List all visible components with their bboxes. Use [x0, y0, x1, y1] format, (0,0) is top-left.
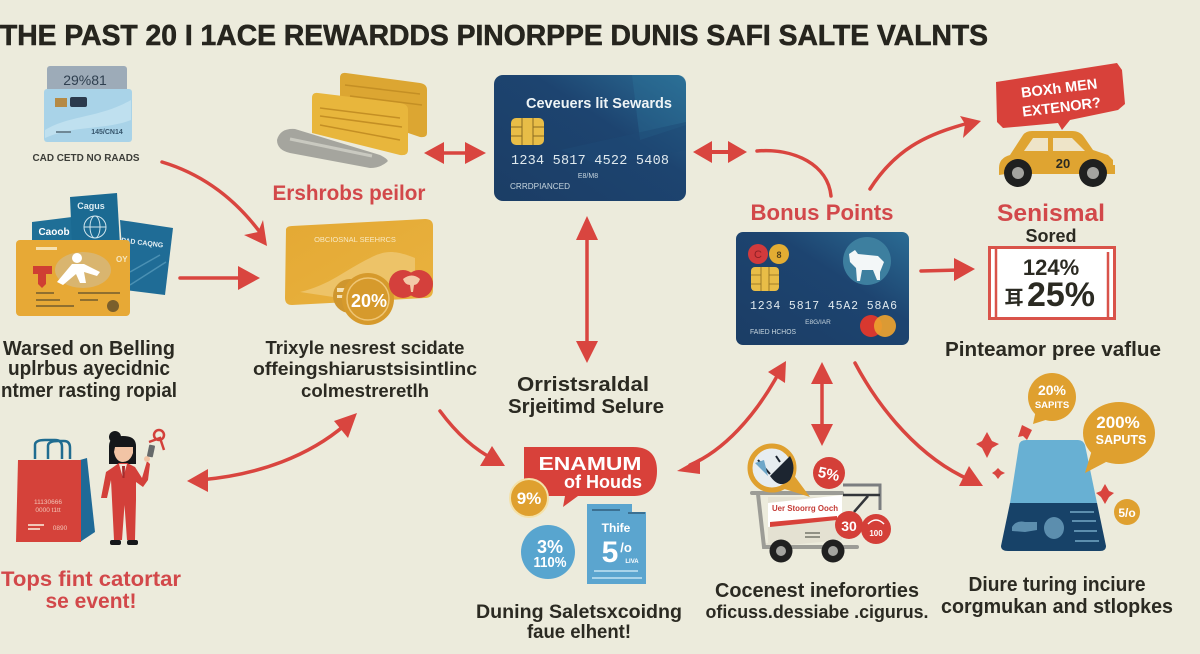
icon: card stack: OY: [116, 255, 128, 264]
icon: card stack: [16, 193, 173, 316]
label: center text: Orristsraldal: [517, 373, 649, 396]
badge: 9%: [510, 479, 548, 517]
badge: 5%: 5%: [816, 464, 841, 485]
icon: light blue card: 29%81: [63, 72, 107, 88]
arrow: center left to enamum: [440, 411, 505, 466]
arrow: bonus to sign: [921, 258, 975, 281]
icon: woman with phone: [101, 430, 164, 545]
panel: blue 5% leaflet: 5: [602, 536, 618, 569]
callout: 200% SAPUTS: SAPUTS: [1096, 433, 1146, 447]
callout: ENAMUM of Houds: [524, 447, 657, 507]
callout: 200% SAPUTS: [1083, 402, 1155, 473]
icon: light blue card: 145/CN14: [91, 129, 123, 136]
arrow: vertical between navy card and center text: [576, 216, 598, 363]
arrow: card stack to gold card: [180, 266, 260, 290]
panel: blue 5% leaflet: /o: [620, 540, 632, 555]
arrow: gold tickets to navy card: [424, 142, 486, 164]
label: bottom left red text: se event!: [46, 589, 136, 613]
label: Cocenest text: Cocenest inefororties: [715, 580, 919, 602]
label: Bonus Points heading: Bonus Points: [750, 200, 894, 225]
callout: BOXH MEN: BOXh MEN: [1020, 76, 1098, 102]
callout: 20% SAPITS: 20%: [1038, 382, 1067, 398]
panel: gold card: 20%: [351, 291, 387, 311]
icon: light blue card: [44, 66, 132, 142]
label: Pinteamor text: Pinteamor pree vaflue: [945, 338, 1161, 361]
badge: 100: [861, 514, 891, 544]
panel: bonus navy card: 1234 5817 45A2 58A6: [750, 300, 897, 313]
label: red heading gold: Ershrobs peilor: [272, 181, 426, 205]
panel: gold card: OBCIOSNAL SEEHRCS: [314, 235, 396, 244]
badge: 5% small: [1114, 499, 1140, 525]
arrow: bonus to car: [870, 116, 981, 189]
panel: navy card: E8/M8: [578, 173, 598, 180]
panel: gold card: [285, 219, 433, 325]
callout: 200% SAPUTS: 200%: [1096, 413, 1140, 432]
arrow: bonus to center bottom double: [811, 362, 833, 446]
icon: yellow car: [999, 131, 1115, 187]
callout: BOXH MEN: EXTENOR?: [1021, 95, 1102, 121]
icon: red sparkles: [976, 425, 1114, 504]
label: Diure turing text: Diure turing inciure: [968, 574, 1146, 596]
panel: blue 5% leaflet: [587, 504, 646, 584]
callout: BOXH MEN: [996, 63, 1125, 130]
icon: yellow car: 20: [1056, 156, 1070, 171]
icon: gold ticket stack: [277, 73, 427, 168]
badge: 30: [835, 511, 863, 539]
label: left middle text: Warsed on Belling: [3, 338, 175, 360]
callout: ENAMUM of Houds: ENAMUM: [538, 453, 642, 474]
arrow: navy card to bonus: [693, 141, 831, 196]
label: middle text center-left: Trixyle nesrest scidate: [266, 337, 464, 358]
arrow: bonus to blue device: [855, 363, 983, 486]
badge: 100: 100: [869, 529, 883, 538]
icon: shopping bag: 0890: [53, 525, 68, 532]
panel: bonus navy card: [736, 232, 909, 345]
badge: 5%: [813, 457, 845, 489]
badge: 5% small: 5/o: [1118, 506, 1136, 520]
label: Diure turing text: corgmukan and stlopkes: [941, 596, 1173, 618]
icon: card stack: Caoob: [38, 227, 70, 238]
icon: shopping bag: 11130666: [34, 499, 62, 506]
panel: percentage sign: 耳: [1004, 288, 1024, 309]
arrow: top left card to gold card: [162, 162, 267, 246]
panel: percentage sign: [990, 248, 1114, 318]
label: middle text center-left: offeingshiarustsisintlinc: [253, 358, 477, 379]
icon: blue device: [1001, 440, 1106, 551]
badge: 9%: 9%: [517, 489, 541, 508]
callout: ENAMUM of Houds: of Houds: [564, 471, 642, 492]
panel: bonus navy card: E8G/IAR: [805, 319, 831, 326]
badge: 3% 110%: [521, 525, 575, 579]
panel: navy card: Ceveuers lit Sewards: [526, 96, 672, 112]
label: left middle text: uplrbus ayecidnic: [8, 358, 170, 380]
panel: blue 5% leaflet: LIVA: [625, 559, 639, 565]
label: During Sales text: Duning Saletsxcoidng: [476, 601, 682, 623]
panel: navy card: 1234 5817 4522 5408: [511, 154, 669, 169]
label: Cocenest text: oficuss.dessiabe .cigurus.: [706, 601, 928, 622]
panel: bonus navy card: 8: [776, 250, 782, 260]
icon: shopping bag: 0000 t1tt: [35, 507, 61, 514]
label: middle text center-left: colmestreretlh: [301, 380, 429, 401]
icon: card stack: PAD CAQNG: [121, 237, 164, 250]
icon: magnifier: [750, 446, 810, 497]
label: Senismal heading: Senismal: [997, 200, 1105, 227]
label: Sored: Sored: [1025, 226, 1077, 246]
panel: bonus navy card: C: [754, 249, 762, 261]
label: During Sales text: faue elhent!: [527, 621, 631, 643]
panel: navy card: [494, 75, 686, 201]
label: left middle text: ntmer rasting ropial: [1, 380, 177, 402]
panel: percentage sign: 124%: [1023, 255, 1079, 280]
icon: shopping cart: Uer Stoorrg Ooch: [772, 504, 838, 513]
label: bottom left red text: Tops fint catortar: [1, 567, 182, 591]
icon: card stack: Cagus: [77, 201, 105, 211]
icon: shopping bag: [16, 440, 95, 542]
label: center text: Srjeitimd Selure: [508, 395, 664, 418]
badge: 3% 110%: 110%: [534, 554, 566, 571]
badge: 30: 30: [841, 518, 857, 534]
badge: 3% 110%: 3%: [537, 537, 563, 557]
panel: percentage sign: 25%: [1027, 276, 1095, 314]
label: card caption: CAD CETD NO RAADS: [32, 153, 140, 164]
callout: 20% SAPITS: SAPITS: [1035, 400, 1069, 411]
panel: bonus navy card: FAIED HCHOS: [750, 327, 796, 336]
arrow: woman to center left double: [187, 413, 357, 492]
callout: 20% SAPITS: [1028, 373, 1076, 424]
panel: navy card: CRRDPIANCED: [510, 182, 570, 191]
panel: blue 5% leaflet: Thife: [602, 521, 631, 535]
title: THE PAST 20 I 1ACE REWARDDS PINORPPE DUNIS SAFI SALTE VALNTS: [0, 20, 988, 52]
icon: shopping cart: [752, 485, 880, 562]
arrow: bonus to enamum double: [677, 361, 786, 474]
